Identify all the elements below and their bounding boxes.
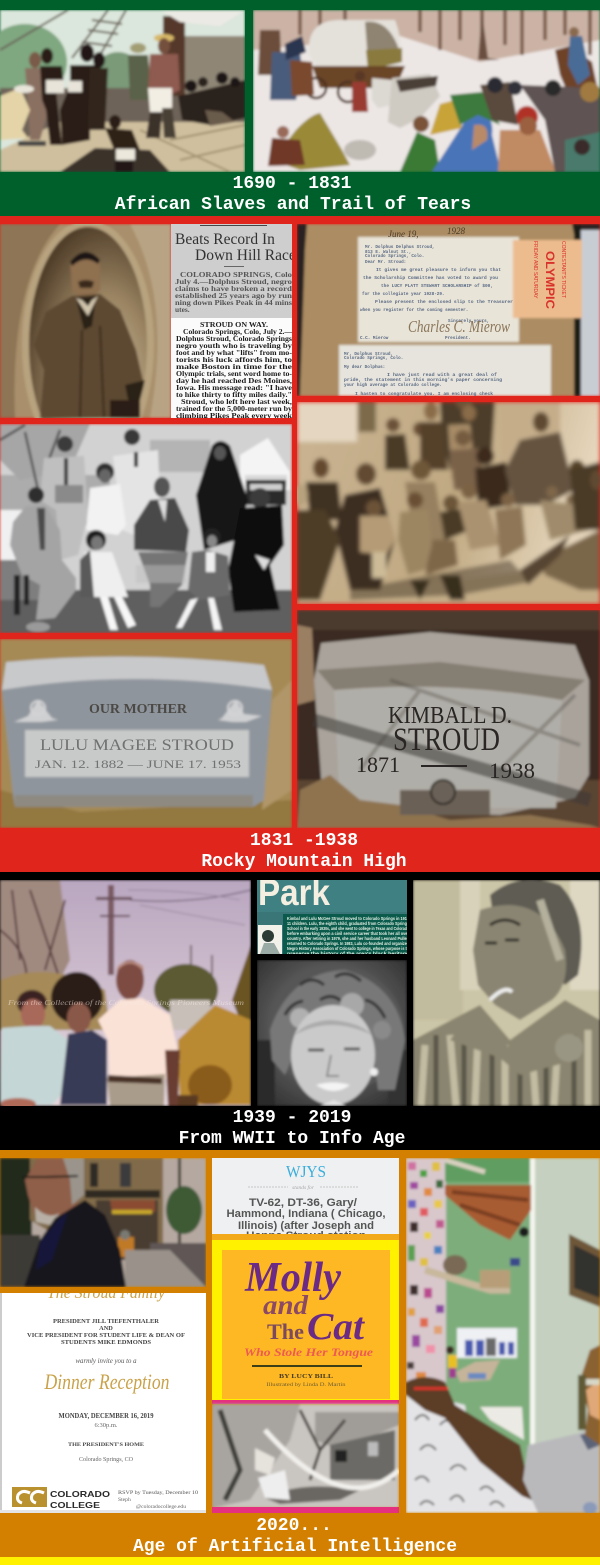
photo: teal park sign: Negro History Association of Colorado Springs, whose purpose is to (287, 946, 409, 951)
photo: newspaper clippings: Olympic trials, sent word home to- (176, 369, 292, 378)
photo: scholarship letter and Olympic ticket scrapbook: Please present the enclosed slip to the Treasurer (375, 300, 513, 305)
photo: newspaper clippings: Beats Record In (175, 231, 275, 248)
photo: teal park sign: 11 children. Lulu, the eighth child, graduated from Colorado Springs (287, 921, 410, 926)
heading: 1939-2019 From WWII to Info Age (179, 1108, 405, 1149)
overseer with hat (130, 43, 146, 53)
standing woman dark coat (196, 441, 248, 550)
photo: Colorado College dinner invitation: STUDENTS MIKE EDMONDS (61, 1339, 152, 1346)
heading: 1690 - 1831 African Slaves and Trail of Tears (115, 174, 471, 215)
photo: scholarship letter and Olympic ticket scrapbook (297, 224, 600, 397)
photo: Lulu Magee Stroud gravestone (0, 639, 292, 828)
photo: WJYS station text card: TV-62, DT-36, Gary/ (249, 1197, 357, 1209)
heading: 2020 Age of Artificial Intelligence: Age of Artificial Intelligence (133, 1537, 457, 1557)
photo: slave ship deck engraving (0, 10, 245, 172)
photo: scholarship letter and Olympic ticket scrapbook: the Scholarship Committee has voted to award you (363, 276, 498, 281)
young woman with afro (51, 972, 103, 1024)
photo: Molly and The Cat book cover with sketch: BY LUCY BILL (279, 1373, 334, 1380)
photo: scholarship letter and Olympic ticket scrapbook: Colorado Springs, Colo. (344, 356, 403, 361)
photo: newspaper clippings: torists his luck affords him, to (176, 355, 292, 364)
photo: newspaper clippings: Iowa. His message read: "I have (176, 383, 293, 392)
icon: Colorado College logo: @coloradocollege.edu (136, 1504, 186, 1510)
photo: teal park sign: before embarking upon a civil service career that took her all over (287, 931, 409, 936)
photo: scholarship letter and Olympic ticket scrapbook: Colorado Springs, Colo. (365, 254, 424, 259)
photo: Colorado College dinner invitation: Colorado Springs, CO (79, 1457, 134, 1463)
photo: WJYS station text card (212, 1158, 399, 1242)
photo: Molly and The Cat book cover with sketch: Cat (307, 1306, 365, 1348)
artist arm and hand (406, 1377, 532, 1500)
crouched slaves (178, 80, 245, 125)
photo: scholarship letter and Olympic ticket scrapbook: June 19, (388, 229, 418, 239)
photo: Trail of Tears painting (253, 10, 600, 172)
photo: newspaper portrait of older woman (413, 879, 600, 1106)
front kids (366, 500, 382, 516)
photo: newspaper clippings: day he had reached Des Moines, (176, 376, 292, 385)
section: 2020 orange band (0, 1150, 600, 1565)
photo: Molly and The Cat book cover with sketch: Molly (244, 1255, 341, 1301)
photo: scholarship letter and Olympic ticket scrapbook: your high average at Colorado college. (344, 383, 442, 388)
seated man center (154, 477, 170, 497)
girl in white dress (96, 463, 114, 481)
photo: scholarship letter and Olympic ticket scrapbook: C.C. Mierow (360, 336, 389, 341)
photo: teal park sign (257, 880, 407, 954)
photo: Colorado College dinner invitation: 6:30p.m. (94, 1422, 118, 1429)
photo: scholarship letter and Olympic ticket scrapbook: pride, the statement in this morning's paper concerning (344, 378, 502, 383)
photo: teal park sign: returned to Colorado Springs. In 1983, Lulu co-founded and organized (287, 941, 409, 946)
standing man in white suit (124, 429, 140, 445)
section: 1939-2019 black band (0, 872, 600, 1150)
photo: newspaper clippings: Stroud, who left here last week, (181, 397, 292, 406)
heading: 2020 Age of Artificial Intelligence: 2020... (256, 1516, 332, 1536)
photo: newspaper clippings: Dolphus Stroud, Colorado Springs (176, 334, 292, 343)
photo: WJYS station text card: Hanna Stroud station (246, 1230, 366, 1242)
middle row (313, 458, 329, 478)
heading: 1939-2019 From WWII to Info Age: From WWII to Info Age (179, 1129, 405, 1149)
photo: large sepia family gathering (292, 394, 600, 604)
photo: Colorado College dinner invitation: MONDAY, DECEMBER 16, 2019 (58, 1413, 154, 1420)
heading: 1831-1938 Rocky Mountain High: 1831 -1938 (250, 831, 358, 851)
photo: Molly and The Cat book cover with sketch: and (263, 1290, 309, 1320)
photo: scholarship letter and Olympic ticket scrapbook: My dear Dolphus: (344, 365, 385, 370)
photo: scholarship letter and Olympic ticket scrapbook: Mr. Dolphus Stroud, (344, 352, 393, 357)
photo: scholarship letter and Olympic ticket scrapbook: President. (445, 336, 471, 341)
photo: newspaper clippings: negro youth who is traveling by (176, 341, 292, 350)
heading: 1690 - 1831 African Slaves and Trail of Tears: 1690 - 1831 (233, 174, 352, 194)
slaves at left (29, 52, 41, 68)
photo: newspaper clippings: COLORADO SPRINGS, Colo (180, 270, 292, 279)
photo: newspaper clippings: Down Hill Race (195, 247, 296, 264)
photo: Kimball D. Stroud gravestone: 1938 (489, 758, 535, 783)
photo: newspaper clippings: to hike thirty to fifty miles daily." (176, 390, 292, 399)
heading: 1831-1938 Rocky Mountain High (201, 831, 407, 872)
photo: Lulu Magee Stroud gravestone: JAN. 12. 1882 — JUNE 17. 1953 (35, 757, 241, 771)
photo: scholarship letter and Olympic ticket scrapbook: when you register for the coming semester. (360, 308, 468, 313)
photo: Molly and The Cat book cover with sketch: Who Stole Her Tongue (244, 1347, 373, 1359)
heading: 1939-2019 From WWII to Info Age: 1939 - 2019 (233, 1108, 351, 1128)
icon: Colorado College logo: Steph (118, 1497, 131, 1503)
heading: 1690 - 1831 African Slaves and Trail of Tears: African Slaves and Trail of Tears (115, 195, 471, 215)
photo: WJYS station text card: stands for (292, 1184, 315, 1191)
photo: scholarship letter and Olympic ticket scrapbook: 813 E. Walnut St., (365, 250, 411, 255)
photo: teal park sign: Park (258, 872, 330, 913)
photo: Kimball D. Stroud gravestone (297, 610, 600, 828)
photo: Colorado College dinner invitation: The Stroud Family (47, 1283, 165, 1302)
photo: scholarship letter and Olympic ticket scrapbook: FRIDAY AND SATURDAY (532, 241, 538, 299)
photo: scholarship letter and Olympic ticket scrapbook: CONTESTANT'S TICKET (560, 241, 566, 298)
photo: newspaper clippings: foot and by what "lifts" from mo- (176, 348, 292, 357)
photo: scholarship letter and Olympic ticket scrapbook: It gives me great pleasure to inform you that (376, 268, 501, 273)
photo: WJYS station text card: Illinois) (after Joseph and (238, 1220, 374, 1232)
photo: Kimball D. Stroud gravestone: KIMBALL D. (388, 703, 512, 729)
photo: newspaper clippings: July 4.—Dolphus Stroud, negro (175, 277, 292, 286)
photo: scholarship letter and Olympic ticket scrapbook: Mr. Dolphus Delphus Stroud, (365, 245, 435, 250)
photo: teal park sign: country. After retiring in 1979, she and her husband Leonard Pullen (287, 936, 409, 941)
photo: scholarship letter and Olympic ticket scrapbook: Dear Mr. Stroud: (365, 260, 406, 265)
photo: scholarship letter and Olympic ticket scrapbook: Sincerely yours, (448, 319, 489, 324)
photo: Kimball D. Stroud gravestone: STROUD (393, 722, 500, 758)
icon: Colorado College logo: COLORADO (50, 1489, 110, 1499)
painting picture frame on wall (569, 1234, 600, 1307)
photo: scholarship letter and Olympic ticket scrapbook: OLYMPIC (543, 251, 557, 309)
photo: scholarship letter and Olympic ticket scrapbook: for the collegiate year 1928-29. (362, 292, 445, 297)
photo: black and white portrait of smiling woman (257, 960, 407, 1106)
photo: newspaper clippings: trained for the 5,000-meter run by (176, 404, 292, 413)
photo: Colorado College dinner invitation: warmly invite you to a (76, 1356, 137, 1365)
photo: man with glasses on city street (0, 1158, 206, 1287)
photo: newspaper clippings: climbing Pikes Peak every week (176, 411, 293, 420)
photo: newspaper clippings: Colorado Springs, Colo, July 2.— (183, 327, 292, 336)
photo: Colorado College dinner invitation: THE PRESIDENT'S HOME (68, 1442, 144, 1448)
photo: newspaper clippings: make Boston in time for the (176, 362, 293, 371)
photo: Colorado College dinner invitation: AND (99, 1325, 113, 1332)
photo: scholarship letter and Olympic ticket scrapbook: the LUCY PLATT STEWART SCHOLARSHIP of $00, (381, 284, 493, 289)
photo: scholarship letter and Olympic ticket scrapbook: I hasten to congratulate you. I am enclosing check (355, 392, 493, 397)
photo: Molly and The Cat book cover with sketch: Illustrated by Linda D. Martin (266, 1382, 346, 1388)
confetti crowd (407, 1162, 457, 1378)
photo: teal park sign: Kimbal and Lulu McGee Stroud moved to Colorado Springs in 1910 (287, 916, 410, 921)
photo: Molly and The Cat book cover with sketch (212, 1234, 399, 1513)
seated woman fur (250, 488, 270, 508)
standing man left (57, 436, 73, 452)
photo: Molly and The Cat book cover with sketch: The (267, 1319, 304, 1344)
older man (116, 960, 144, 1000)
photo: teal park sign: preserve the history of the area's black heritage (287, 951, 410, 956)
photo: WJYS station text card: Hammond, Indiana ( Chicago, (226, 1208, 386, 1220)
photo: teal park sign: School in the early 1930s, and she went to college in Texas and Colorado (287, 926, 409, 931)
photo: Lulu Magee Stroud gravestone: OUR MOTHER (89, 702, 188, 717)
section: 1831-1938 red band (0, 216, 600, 872)
photo: newspaper clippings: STROUD ON WAY. (200, 320, 268, 329)
photo: black and white family portrait outdoors (0, 424, 292, 633)
photo: Colorado College dinner invitation: Dinner Reception (44, 1369, 169, 1394)
little girl right (204, 529, 220, 541)
photo: Colorado College dinner invitation: PRESIDENT JILL TIEFENTHALER (53, 1318, 159, 1325)
icon: Colorado College logo: RSVP by Tuesday, December 10 (118, 1490, 198, 1496)
photo: newspaper clippings: ning down Pikes Peak in 44 mins (175, 298, 292, 307)
photo: scholarship letter and Olympic ticket scrapbook: I have just read with a great deal of (387, 373, 497, 378)
photo: scholarship letter and Olympic ticket scrapbook: 1928 (447, 226, 466, 236)
photo: newspaper clippings: utes. (175, 305, 190, 314)
photo: Colorado College dinner invitation: VICE PRESIDENT FOR STUDENT LIFE & DEAN OF (27, 1332, 185, 1339)
photo: scholarship letter and Olympic ticket scrapbook: Charles C. Mierow (408, 317, 511, 336)
woman left (17, 990, 47, 1016)
icon: Colorado College logo (12, 1487, 198, 1510)
photo: newspaper clippings: established 25 years ago by run (175, 291, 292, 300)
photo: oval studio portrait (0, 224, 171, 418)
photo: faded colour family snapshot: From the Collection of the Colorado Springs Pioneers Museum (7, 999, 244, 1007)
photo: faded colour family snapshot (0, 880, 251, 1110)
icon: Colorado College logo: COLLEGE (50, 1500, 100, 1510)
photo: Colorado College dinner invitation (0, 1283, 206, 1513)
photo: WJYS station text card: WJYS (286, 1162, 326, 1181)
photo: newspaper clippings (171, 224, 296, 420)
little girl left (86, 530, 106, 550)
photo: Kimball D. Stroud gravestone: 1871 (356, 752, 400, 777)
photo: newspaper clippings: claims to have broken a record (175, 284, 293, 293)
section: 1690-1831 green band (0, 0, 600, 216)
back row (440, 402, 495, 470)
photo: artist painting colourful mural (406, 1158, 600, 1514)
heading: 2020 Age of Artificial Intelligence (133, 1516, 457, 1557)
seated boy (28, 487, 44, 503)
photo: Lulu Magee Stroud gravestone: LULU MAGEE STROUD (40, 737, 234, 754)
heading: 1831-1938 Rocky Mountain High: Rocky Mountain High (201, 852, 407, 872)
slave in hatch (109, 115, 121, 129)
